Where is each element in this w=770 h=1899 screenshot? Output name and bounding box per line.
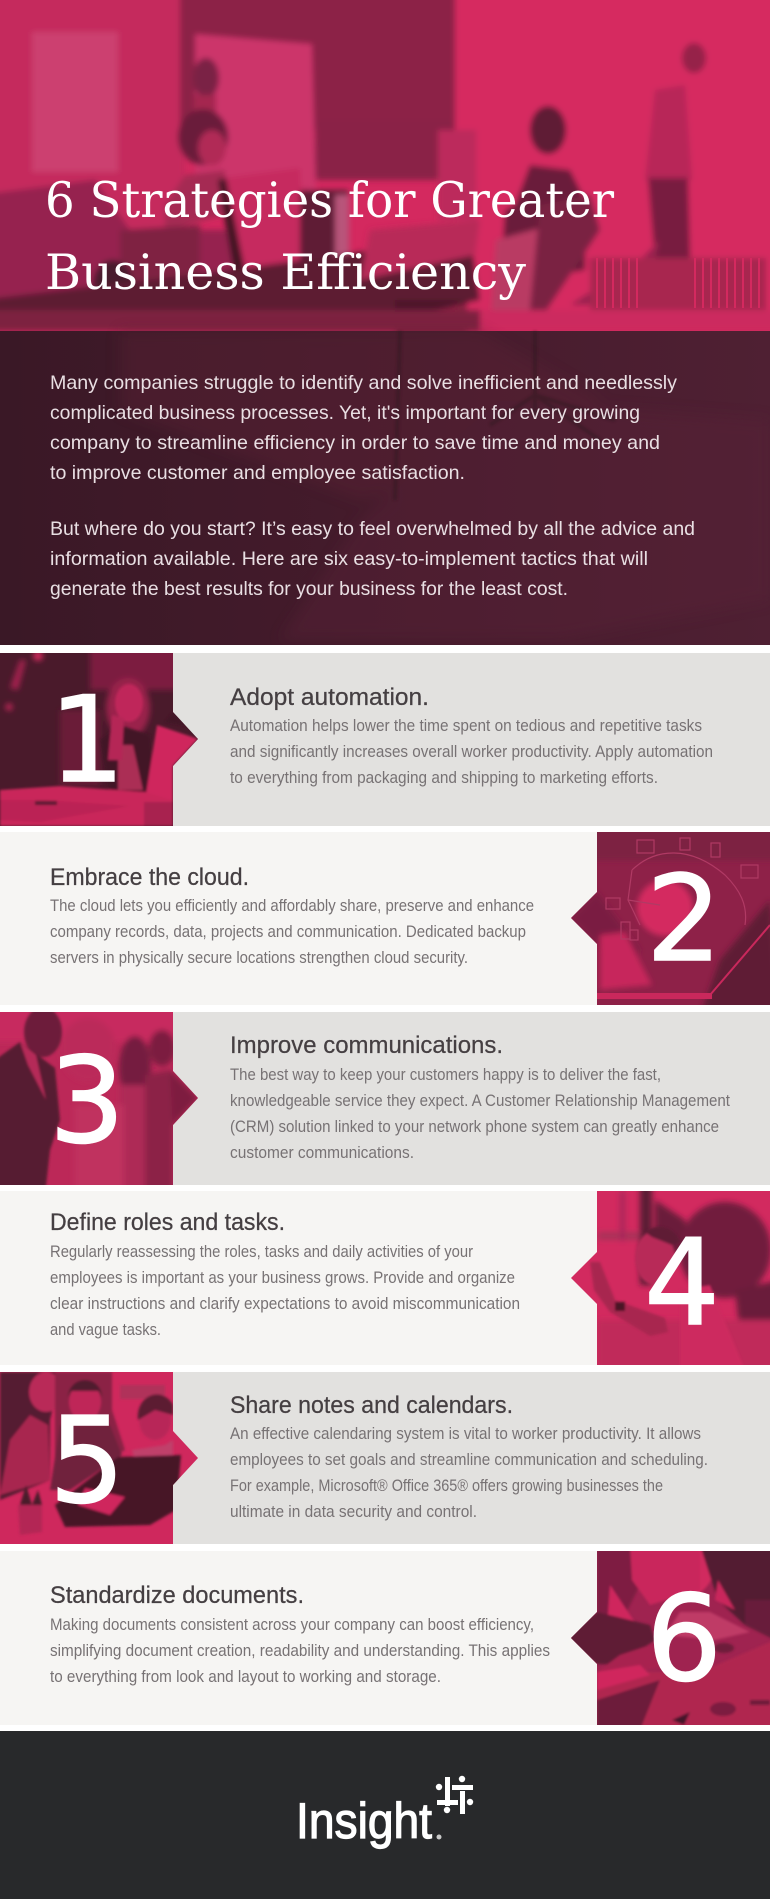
intro text: generate the best results for your business for the least cost. [50,578,568,600]
heading: Define roles and tasks. [50,1209,285,1236]
body text: company records, data, projects and communication. Dedicated backup [50,922,526,941]
body text [50,896,534,967]
photo: people in discussion [570,1185,770,1375]
body text [230,716,713,787]
hero photo panel [0,0,770,645]
body text: employees is important as your business grows. Provide and organize [50,1268,515,1287]
photo: team around laptop [0,1372,200,1544]
panel: strategy 6 [0,1540,770,1730]
body text: The cloud lets you efficiently and affordably share, preserve and enhance [50,896,534,915]
body text: customer communications. [230,1143,414,1162]
number 1: 1 [49,672,125,810]
panel: strategy 4 [0,1185,770,1375]
heading: Share notes and calendars. [230,1392,513,1419]
heading: Improve communications. [230,1032,503,1059]
body text: For example, Microsoft® Office 365® offers growing businesses the [230,1476,663,1495]
title: Business Efficiency [45,244,526,301]
body text: Making documents consistent across your company can boost efficiency, [50,1615,534,1634]
body text: to everything from look and layout to working and storage. [50,1667,441,1686]
intro text: Many companies struggle to identify and solve inefficient and needlessly [50,372,677,394]
panel: strategy 3 [0,1012,770,1185]
number 2: 2 [646,851,722,989]
intro text: complicated business processes. Yet, it's important for every growing [50,402,640,424]
title [45,172,615,301]
intro text [50,372,695,600]
body text [230,1065,730,1162]
body text: Automation helps lower the time spent on tedious and repetitive tasks [230,716,702,735]
title: 6 Strategies for Greater [45,172,615,229]
footer [0,1731,770,1899]
heading: Embrace the cloud. [50,864,249,891]
panel: strategy 5 [0,1372,770,1544]
body text: clear instructions and clarify expectations to avoid miscommunication [50,1294,520,1313]
panel: strategy 1 [0,640,770,826]
body text [50,1242,520,1339]
intro text: company to streamline efficiency in order to save time and money and [50,432,660,454]
body text: and vague tasks. [50,1320,161,1339]
body text: servers in physically secure locations strengthen cloud security. [50,948,468,967]
body text [230,1424,708,1521]
number 3: 3 [49,1033,125,1171]
photo: woman at laptop [0,640,200,826]
logo: Insight [296,1776,473,1849]
photo: cloud network on laptop [571,832,770,1005]
body text: An effective calendaring system is vital to worker productivity. It allows [230,1424,701,1443]
body text: Regularly reassessing the roles, tasks and daily activities of your [50,1242,473,1261]
number 4: 4 [644,1215,720,1353]
body text [50,1615,550,1686]
intro text: information available. Here are six easy-to-implement tactics that will [50,548,648,570]
body text: and significantly increases overall worker productivity. Apply automation [230,742,713,761]
logo: Insight: Insight [296,1793,432,1849]
heading: Standardize documents. [50,1582,304,1609]
body text: ultimate in data security and control. [230,1502,477,1521]
number 6: 6 [646,1571,722,1709]
photo: business people [0,1012,198,1185]
icon: Insight hash mark [436,1776,473,1814]
heading: Adopt automation. [230,684,429,711]
intro text: to improve customer and employee satisfaction. [50,462,465,484]
body text: employees to set goals and streamline communication and scheduling. [230,1450,708,1469]
intro text: But where do you start? It’s easy to feel overwhelmed by all the advice and [50,518,695,540]
panel: strategy 2 [0,832,770,1005]
number 5: 5 [49,1393,125,1531]
body text: The best way to keep your customers happy is to deliver the fast, [230,1065,661,1084]
body text: to everything from packaging and shipping to marketing efforts. [230,768,658,787]
photo: hands over documents [571,1551,770,1725]
dark intro overlay [0,331,770,645]
body text: (CRM) solution linked to your network phone system can greatly enhance [230,1117,719,1136]
body text: simplifying document creation, readability and understanding. This applies [50,1641,550,1660]
